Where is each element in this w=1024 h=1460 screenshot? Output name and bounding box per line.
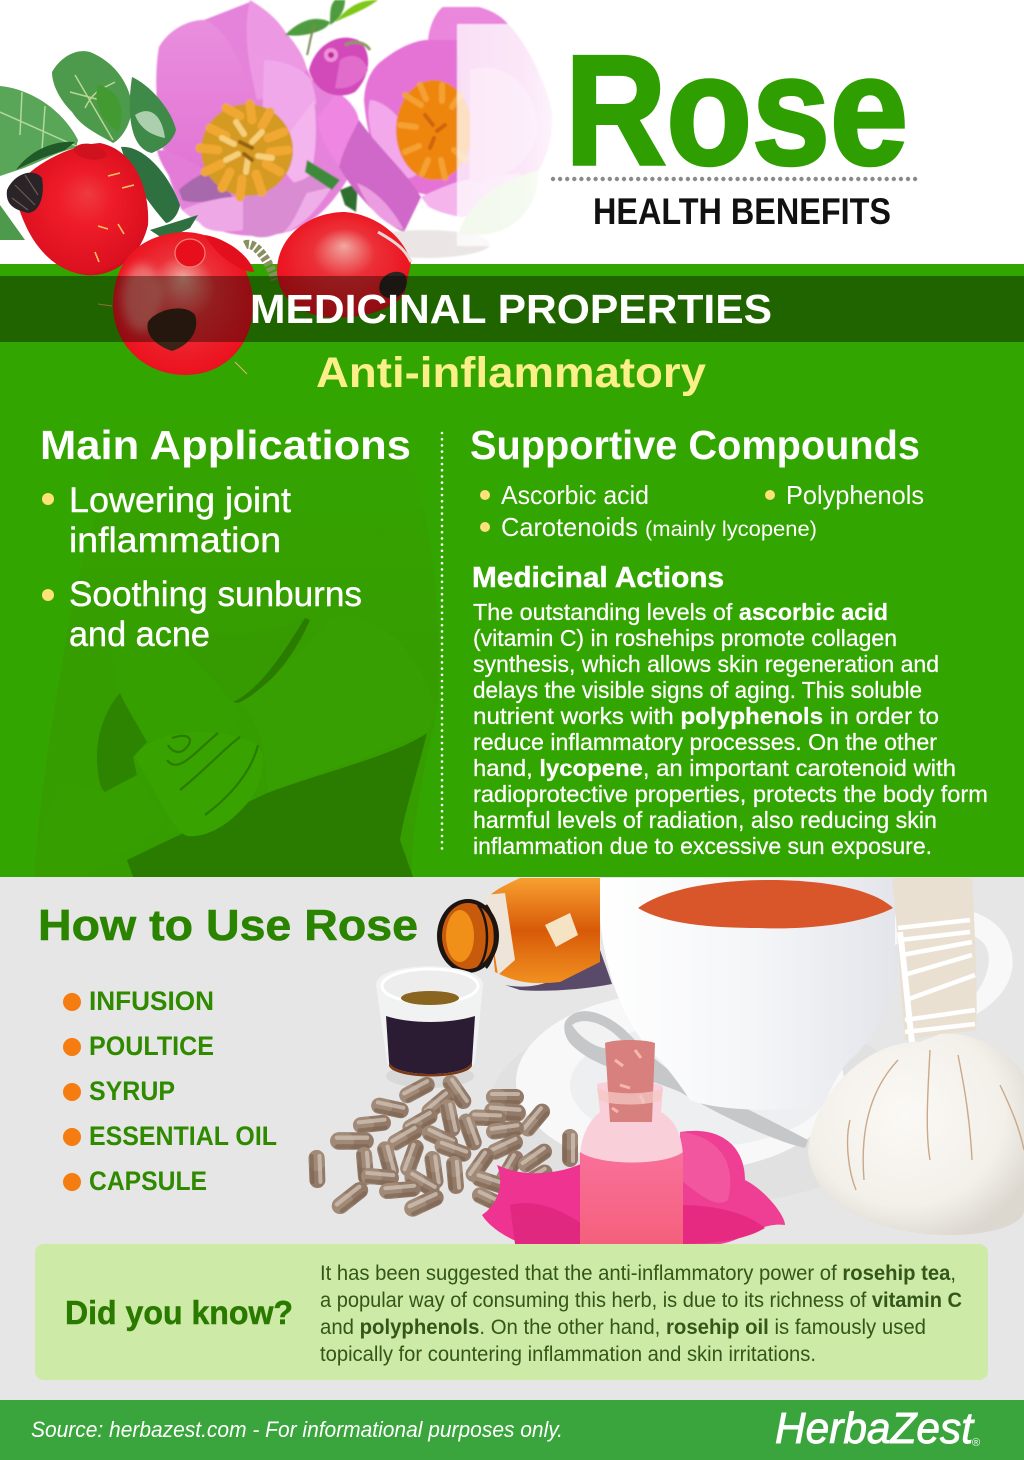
text block: medicinal actions: synthesis, which allows skin regeneration and xyxy=(473,651,939,677)
list item: essential oil: ESSENTIAL OIL xyxy=(89,1121,277,1151)
list item: lowering joint inflammation xyxy=(42,481,291,560)
illustration: rose flowers and leaves xyxy=(156,0,555,258)
list item: capsule: CAPSULE xyxy=(89,1166,207,1196)
illustration: plastic cup with syrup xyxy=(376,966,483,1088)
illustration: rose petals xyxy=(482,1131,785,1244)
heading: medicinal properties: MEDICINAL PROPERTIES xyxy=(250,286,772,332)
list item: syrup: SYRUP xyxy=(89,1076,175,1106)
icon: rose bud xyxy=(309,38,370,96)
text block: medicinal actions: The outstanding levels of ascorbic acid xyxy=(473,599,888,625)
icon: golden stamens xyxy=(200,104,293,197)
list item: soothing sunburns and acne: Soothing sunburns xyxy=(69,575,362,614)
text block: medicinal actions: nutrient works with polyphenols in order to xyxy=(473,703,939,729)
illustration: rose oil bottle with cork xyxy=(580,1040,683,1244)
panel: how to use background xyxy=(0,877,1024,1400)
logo: HerbaZest: ® xyxy=(972,1437,980,1449)
heading: how to use rose: How to Use Rose xyxy=(38,901,418,950)
footer: source bar xyxy=(0,1400,1024,1460)
background: white header xyxy=(0,0,1024,264)
text block: did you know: topically for countering inflammation and skin irritations. xyxy=(320,1342,816,1366)
title: Rose: Rose xyxy=(565,24,908,198)
illustration: green arm silhouette with hand xyxy=(35,420,439,877)
divider: dotted title line xyxy=(553,177,917,181)
text block: did you know xyxy=(320,1261,962,1366)
list item: soothing sunburns and acne xyxy=(42,575,362,654)
icon: white fade overlay xyxy=(457,24,555,246)
band: dark title band xyxy=(0,276,1024,342)
divider: dotted column line xyxy=(441,433,443,852)
illustration: saucer and spoon xyxy=(490,992,910,1205)
panel: medicinal properties background xyxy=(0,264,1024,877)
heading: anti-inflammatory: Anti-inflammatory xyxy=(316,349,706,397)
icon: right pink rose xyxy=(339,7,552,232)
text block: did you know: a popular way of consuming this herb, is due to its richness of vitamin C xyxy=(320,1288,962,1312)
icon: rose haze under flowers xyxy=(360,230,490,258)
illustration: rosehip leaves xyxy=(0,51,275,280)
illustration: amber syrup bottle xyxy=(437,878,612,991)
illustration: rosehip right xyxy=(277,212,411,318)
text block: medicinal actions: (vitamin C) in roshehips promote collagen xyxy=(473,625,897,651)
panel: did you know xyxy=(35,1244,988,1380)
list item: carotenoids xyxy=(480,512,817,542)
subtitle: health benefits: HEALTH BENEFITS xyxy=(593,191,891,232)
heading: supportive compounds: Supportive Compounds xyxy=(470,422,920,468)
text block: medicinal actions: delays the visible signs of aging. This soluble xyxy=(473,677,922,703)
icon: left pink rose xyxy=(156,0,362,237)
panel: main applications xyxy=(40,422,411,654)
icon: top leaves xyxy=(285,0,378,55)
list: how to use xyxy=(63,986,277,1196)
text block: did you know: It has been suggested that the anti-inflammatory power of rosehip tea, xyxy=(320,1261,956,1285)
text block: medicinal actions: radioprotective properties, protects the body form xyxy=(473,781,988,807)
text block: medicinal actions: reduce inflammatory processes. On the other xyxy=(473,729,937,755)
heading: did you know: Did you know? xyxy=(65,1294,293,1331)
illustration: herbal poultice xyxy=(808,878,1024,1235)
illustration: tea cup xyxy=(598,878,1013,1110)
list item: ascorbic acid: Ascorbic acid xyxy=(501,480,649,510)
illustration: brown capsules xyxy=(308,1072,578,1219)
text block: medicinal actions: inflammation due to excessive sun exposure. xyxy=(473,833,932,859)
heading: main applications: Main Applications xyxy=(40,422,411,468)
footer: source note: Source: herbazest.com - For informational purposes only. xyxy=(31,1417,563,1442)
list item: lowering joint inflammation: Lowering joint xyxy=(69,481,291,520)
panel: supportive compounds xyxy=(470,422,988,859)
list item: lowering joint inflammation: inflammation xyxy=(69,521,281,560)
list item: soothing sunburns and acne: and acne xyxy=(69,615,210,654)
text block: did you know: and polyphenols. On the other hand, rosehip oil is famously used xyxy=(320,1315,926,1339)
text block: medicinal actions: harmful levels of radiation, also reducing skin xyxy=(473,807,937,833)
list item: carotenoids: (mainly lycopene) xyxy=(645,518,817,541)
illustration: rosehip left xyxy=(7,143,148,275)
list item: poultice: POULTICE xyxy=(89,1031,214,1061)
logo: HerbaZest: HerbaZest xyxy=(775,1404,975,1453)
text block: medicinal actions xyxy=(473,599,988,859)
icon: pale faded leaf xyxy=(458,170,538,235)
icon: orange stamens xyxy=(396,80,472,180)
illustration: rosehip center xyxy=(98,232,254,375)
list item: infusion: INFUSION xyxy=(89,986,214,1016)
text block: medicinal actions: hand, lycopene, an important carotenoid with xyxy=(473,755,956,781)
list item: polyphenols: Polyphenols xyxy=(786,480,924,510)
heading: medicinal actions: Medicinal Actions xyxy=(472,562,724,594)
list item: carotenoids: Carotenoids xyxy=(501,512,638,542)
